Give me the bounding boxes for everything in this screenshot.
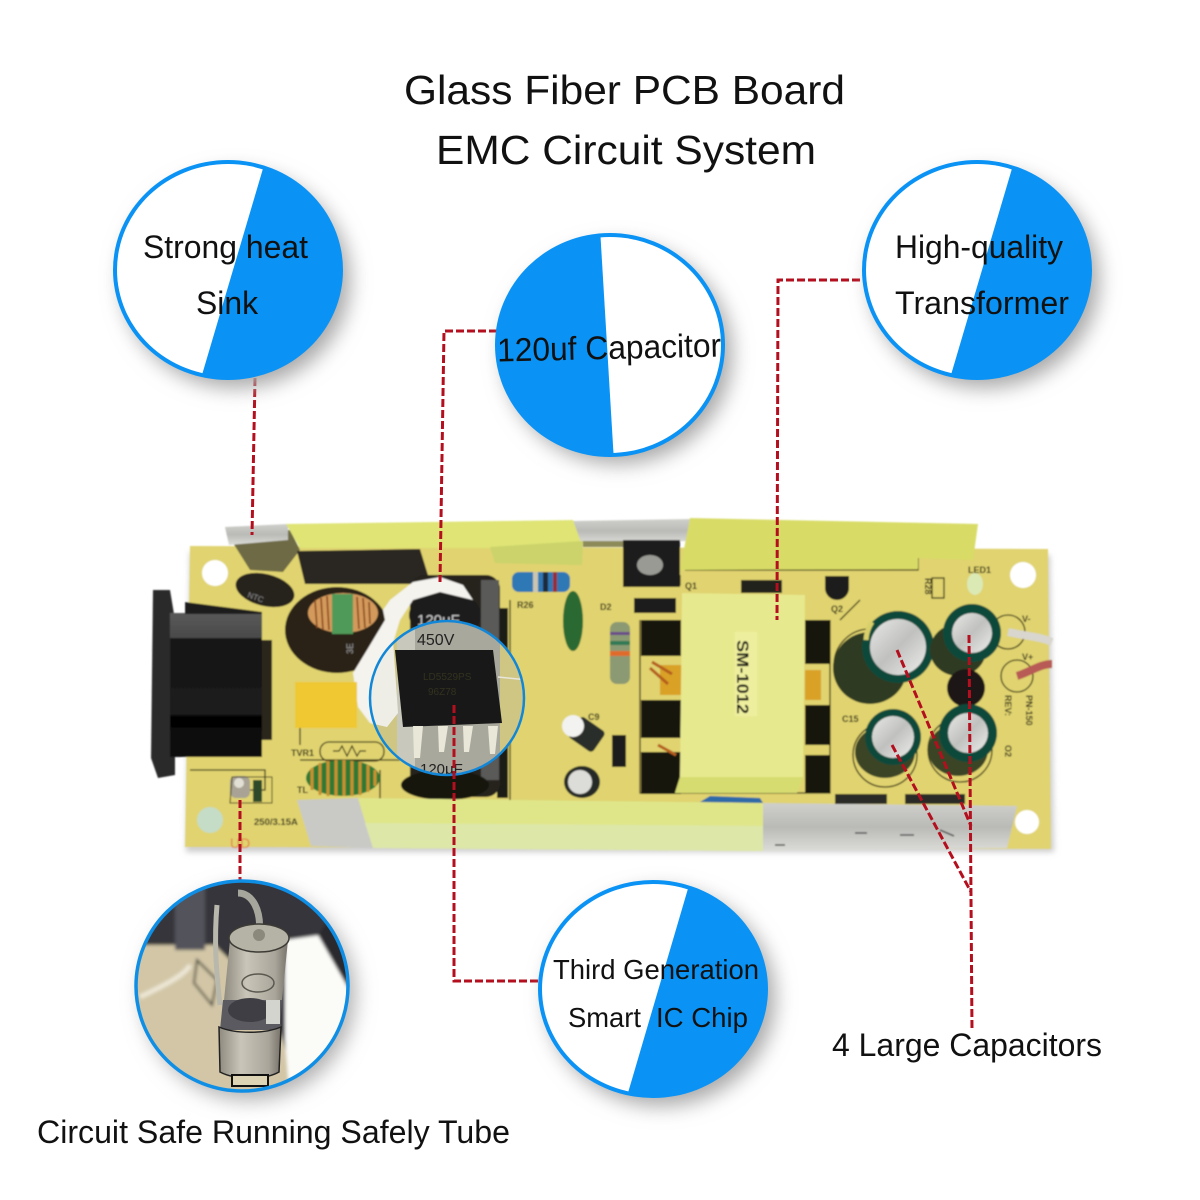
IC chip magnifier: 450V bbox=[417, 632, 455, 649]
resistor R26: R26 bbox=[517, 600, 534, 610]
small capacitors C9 bbox=[562, 712, 606, 798]
diode D2: D2 bbox=[600, 602, 612, 612]
IC chip body: LD5529PS bbox=[423, 672, 472, 683]
title: Glass Fiber PCB Board bbox=[404, 67, 845, 113]
TVR1 label: TVR1 bbox=[291, 748, 314, 758]
title bbox=[404, 67, 845, 173]
LED1 and R28: R28 bbox=[923, 578, 933, 595]
NTC thermistor: NTC bbox=[246, 590, 265, 605]
transistor Q1: Q1 bbox=[685, 581, 697, 591]
callout: third generation smart IC chip: Third Generation bbox=[553, 954, 759, 985]
callout: third generation smart IC chip bbox=[530, 875, 775, 1106]
diode D3 bbox=[612, 735, 626, 767]
green film capacitor bbox=[563, 591, 583, 651]
IC chip body bbox=[395, 650, 502, 727]
small capacitors C9: C9 bbox=[588, 712, 600, 722]
mounting holes bbox=[197, 560, 1039, 834]
top heat sink bracket bbox=[225, 518, 978, 572]
transistor Q1 bbox=[623, 540, 697, 591]
callout: high-quality transformer: High-quality bbox=[895, 229, 1063, 265]
circuit board photo bbox=[151, 518, 1054, 852]
PCB substrate bbox=[185, 546, 1051, 849]
IC chip magnifier bbox=[368, 620, 526, 776]
fuse on board: 250/3.15A bbox=[254, 817, 298, 828]
transformer SM-1012: SM-1012 bbox=[733, 640, 752, 714]
transistor Q2: Q2 bbox=[831, 604, 843, 614]
label: circuit safe running safely tube: Circuit Safe Running Safely Tube bbox=[37, 1114, 510, 1150]
yellow X capacitor bbox=[295, 682, 357, 728]
LED1 and R28: LED1 bbox=[968, 565, 991, 575]
white thermal glue bbox=[353, 577, 473, 727]
rear terminals bbox=[835, 794, 887, 804]
large filter capacitor: 120μF bbox=[417, 612, 460, 629]
output wires and pads: V+ bbox=[1022, 652, 1033, 662]
callout: high-quality transformer bbox=[850, 155, 1099, 388]
resistor R27 bbox=[610, 622, 630, 684]
output wires and pads: PN-150 bbox=[1024, 695, 1034, 726]
common mode choke: 3E bbox=[345, 643, 355, 654]
fuse on board bbox=[230, 776, 298, 851]
callout: third generation smart IC chip: Smart bbox=[568, 1002, 641, 1033]
output choke coil: TL bbox=[297, 785, 308, 795]
callout: strong heat sink: Strong heat bbox=[143, 229, 308, 265]
leader: heat sink bbox=[252, 378, 255, 535]
label: 4 large capacitors: 4 Large Capacitors bbox=[832, 1027, 1102, 1063]
electrolytic capacitor bottom-left bbox=[842, 709, 921, 778]
callout: third generation smart IC chip: IC Chip bbox=[656, 1002, 748, 1033]
transformer SM-1012 bbox=[675, 593, 805, 793]
fuse glass bbox=[220, 1000, 282, 1030]
leader: 120uf capacitor bbox=[440, 331, 497, 582]
electrolytic capacitor bottom-left: C15 bbox=[842, 714, 859, 724]
fuse end cap top bbox=[224, 940, 288, 1000]
callout: strong heat sink: Sink bbox=[196, 285, 259, 321]
leader: fuse bbox=[238, 800, 242, 880]
output wires and pads: REV: bbox=[1003, 695, 1013, 716]
resistor R26 bbox=[512, 572, 570, 610]
bridge block bbox=[297, 549, 428, 584]
bottom heat sink bracket bbox=[297, 796, 1017, 851]
power inlet socket bbox=[151, 590, 272, 778]
transistor Q2 bbox=[825, 576, 849, 614]
electrolytic capacitor top-left bbox=[833, 611, 934, 704]
output wires and pads bbox=[1003, 614, 1052, 757]
large filter capacitor bbox=[401, 575, 508, 800]
leader: IC chip bbox=[454, 705, 538, 981]
fuse end cap bottom bbox=[219, 1027, 281, 1078]
TVR1 label bbox=[291, 742, 384, 761]
IC chip magnifier: 120μF bbox=[420, 761, 463, 778]
IC chip leads bbox=[413, 726, 498, 758]
LED1 and R28 bbox=[923, 565, 991, 598]
transformer windings and pads bbox=[641, 620, 830, 794]
small SMD part bbox=[741, 580, 782, 593]
common mode choke bbox=[285, 587, 389, 673]
callout: 120uf capacitor: 120uf Capacitor bbox=[497, 326, 721, 369]
callout: 120uf capacitor bbox=[495, 228, 732, 464]
leader: transformer bbox=[777, 280, 860, 620]
diode D2 bbox=[600, 598, 676, 613]
electrolytic capacitor top-right bbox=[930, 604, 1001, 676]
callout: high-quality transformer: Transformer bbox=[895, 285, 1069, 321]
output wires and pads: V- bbox=[1022, 614, 1031, 624]
PCB traces bbox=[190, 558, 1033, 800]
output choke coil bbox=[297, 760, 380, 796]
electrolytic capacitor bottom-right bbox=[928, 704, 997, 776]
fuse on board: UD bbox=[230, 835, 250, 851]
output inductor bbox=[947, 669, 985, 707]
IC chip body: 96Z78 bbox=[428, 687, 457, 698]
NTC thermistor bbox=[232, 567, 298, 613]
callout: strong heat sink bbox=[100, 155, 350, 388]
callout: fuse photo bbox=[130, 875, 355, 1100]
leader: four capacitors bbox=[892, 635, 972, 1030]
leader lines bbox=[240, 280, 972, 1030]
title: EMC Circuit System bbox=[436, 127, 816, 173]
board shadow bbox=[186, 552, 1054, 852]
output wires and pads: O2 bbox=[1003, 745, 1013, 757]
